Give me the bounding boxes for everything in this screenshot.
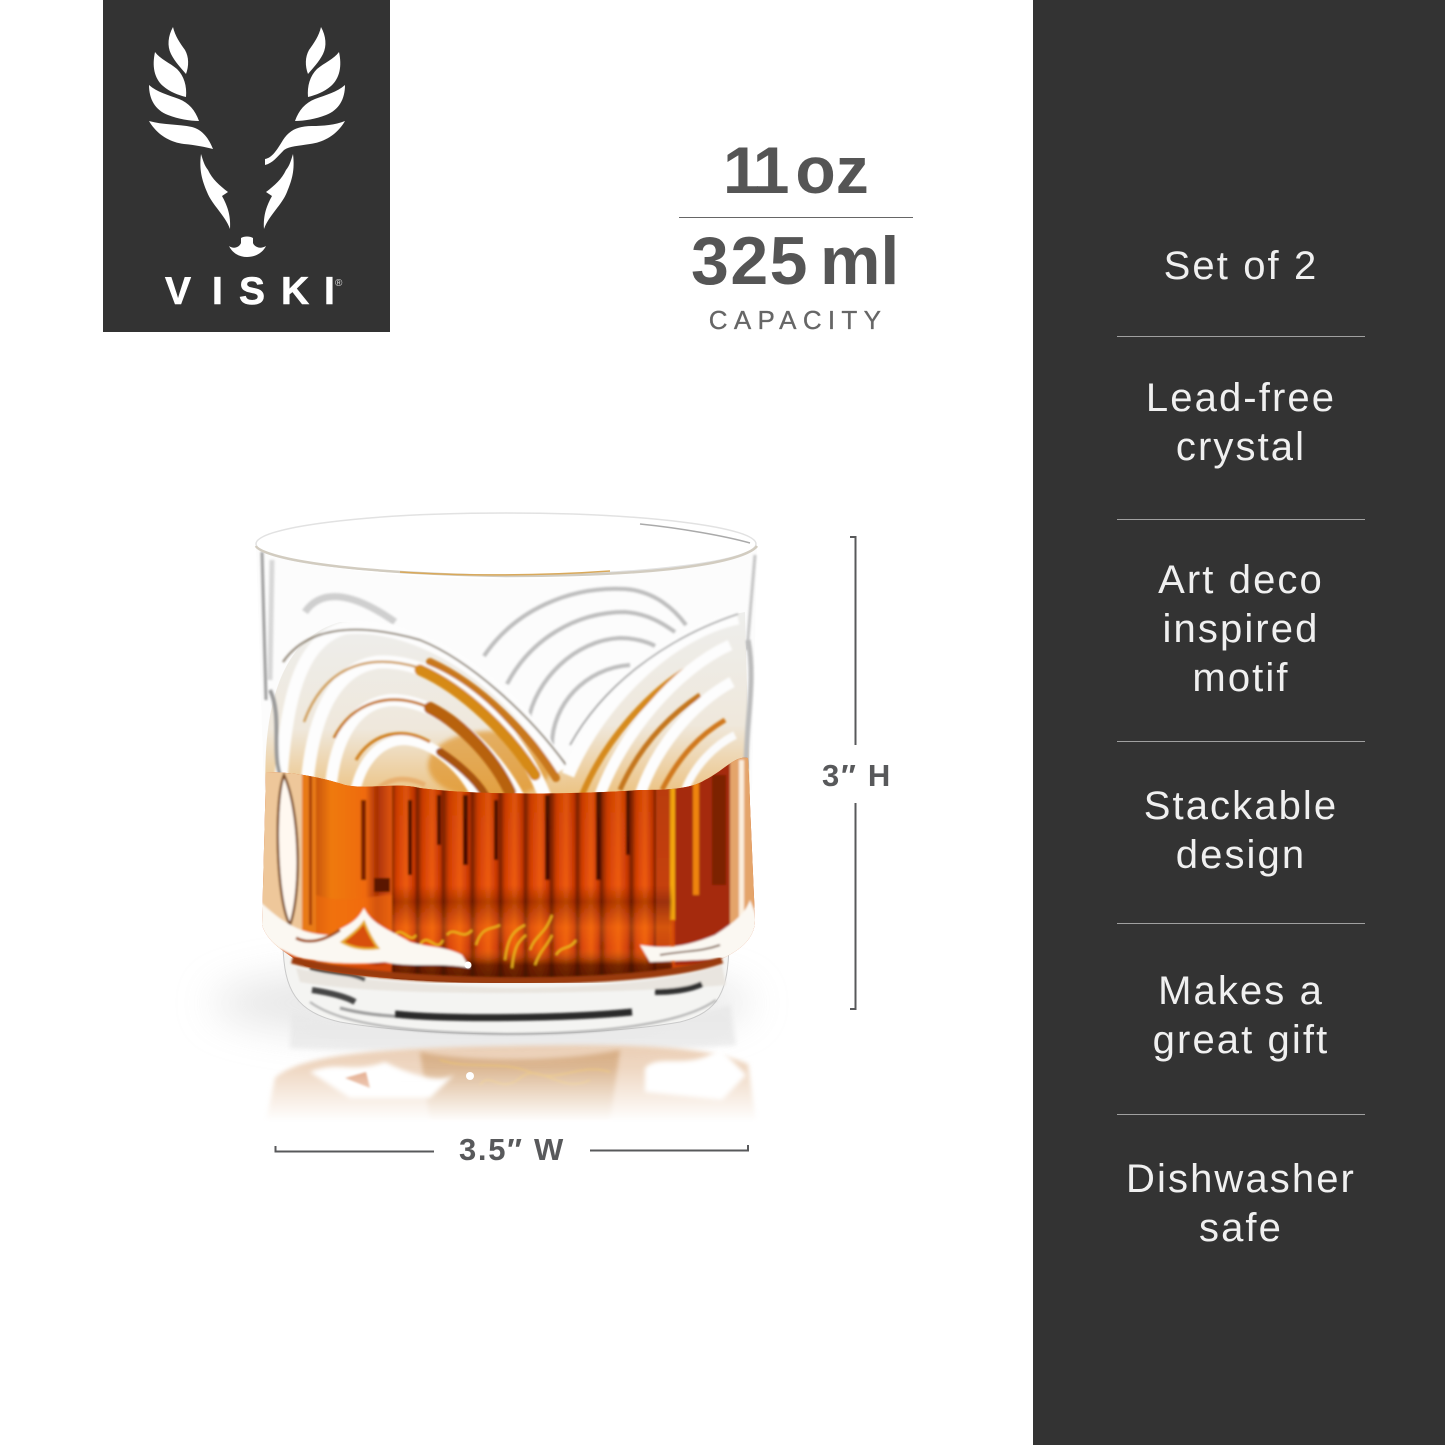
width label: 3.5″ W bbox=[459, 1132, 565, 1167]
feature: makes a great gift: great gift bbox=[1153, 1018, 1329, 1062]
irregular dark streaks bbox=[408, 785, 630, 880]
height bracket bbox=[850, 536, 856, 1010]
table shadow bbox=[212, 967, 752, 1039]
feature: lead-free crystal: Lead-free bbox=[1146, 376, 1336, 420]
divider rule bbox=[679, 217, 913, 218]
vertical tonal shading bbox=[392, 780, 672, 990]
feature: makes a great gift bbox=[1153, 969, 1329, 1062]
feature: art deco motif: motif bbox=[1192, 656, 1290, 700]
capacity block bbox=[679, 133, 913, 335]
gold caustics bbox=[395, 915, 576, 968]
feature: dishwasher safe bbox=[1126, 1157, 1356, 1250]
front arches left and right bbox=[265, 612, 751, 800]
back arches seen through the glass bbox=[305, 589, 686, 745]
left lower clear sparkle bbox=[258, 900, 470, 968]
icon: stag antlers bbox=[149, 27, 345, 313]
capacity millilitres: 325ml bbox=[691, 223, 899, 299]
width bracket bbox=[274, 1145, 749, 1152]
panel: features sidebar bbox=[1033, 0, 1445, 1445]
feature: art deco motif bbox=[1158, 558, 1324, 700]
lower amber band where the base meets the foot bbox=[292, 960, 722, 981]
product photo: whiskey glass bbox=[221, 512, 758, 1118]
broad flute bbox=[316, 775, 392, 965]
feature: lead-free crystal: crystal bbox=[1176, 425, 1306, 469]
glass rim bbox=[256, 513, 757, 576]
feature: dishwasher safe: safe bbox=[1199, 1206, 1283, 1250]
feature: dishwasher safe: Dishwasher bbox=[1126, 1157, 1356, 1201]
feature: art deco motif: Art deco bbox=[1158, 558, 1324, 602]
capacity label: CAPACITY bbox=[709, 305, 887, 335]
width dimension bbox=[274, 1132, 749, 1167]
central flutes bbox=[392, 780, 418, 990]
feature: stackable design: design bbox=[1176, 833, 1306, 877]
feature: art deco motif: inspired bbox=[1163, 607, 1319, 651]
height label: 3″ H bbox=[822, 758, 892, 793]
glass foot bbox=[283, 945, 729, 1034]
wordmark: VISKI bbox=[165, 270, 335, 313]
feature: stackable design bbox=[1144, 784, 1338, 877]
feature: set of 2: Set of 2 bbox=[1164, 244, 1318, 288]
glass clear upper body bbox=[256, 545, 757, 790]
feature: makes a great gift: Makes a bbox=[1158, 969, 1324, 1013]
amber whiskey body with vertical flutes bbox=[258, 750, 760, 995]
glass reflection bbox=[266, 1005, 756, 1122]
logo panel bbox=[103, 0, 390, 332]
height dimension bbox=[822, 536, 892, 1010]
feature: lead-free crystal bbox=[1146, 376, 1336, 469]
capacity ounces: 11oz bbox=[723, 133, 869, 207]
icon: stag antlers: ® bbox=[335, 278, 343, 289]
feature: stackable design: Stackable bbox=[1144, 784, 1338, 828]
clear left edge flutes bbox=[260, 760, 302, 950]
